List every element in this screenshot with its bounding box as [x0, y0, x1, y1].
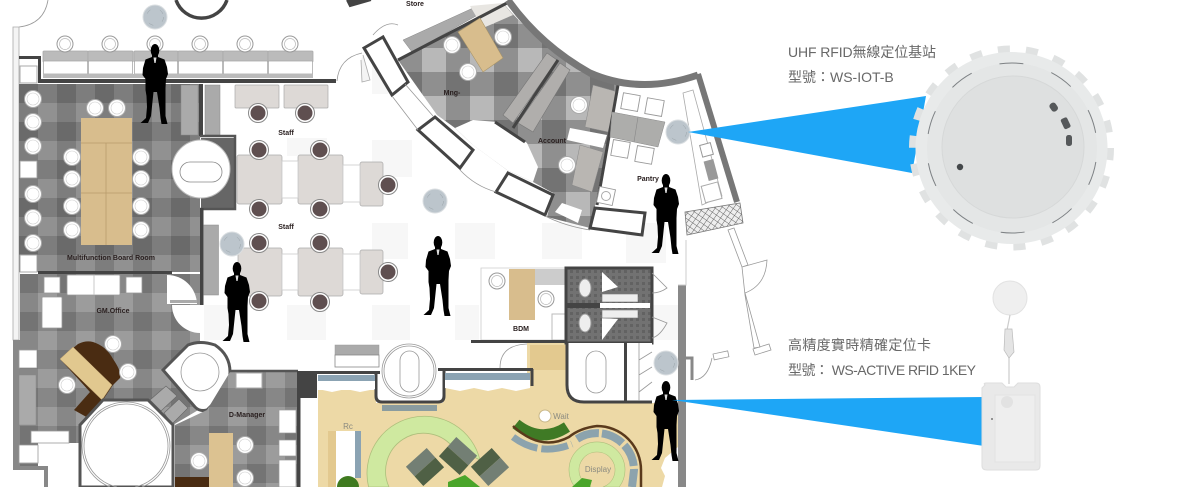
blue beam: base station — [688, 96, 926, 173]
label: staff lower: Staff — [278, 224, 294, 231]
workstation row — [43, 36, 313, 78]
green circular rug — [367, 416, 480, 487]
label: Account: Account — [538, 138, 567, 145]
board table — [81, 118, 132, 245]
top circular room wall — [176, 0, 227, 18]
LEDs — [1048, 101, 1072, 146]
reception desk: Rc — [343, 422, 353, 431]
back to back cabinets — [495, 53, 570, 142]
display area: Display — [585, 465, 611, 474]
pantry chairs — [597, 93, 664, 205]
oval pod — [382, 344, 436, 398]
walls of upper left rooms — [19, 56, 336, 83]
label: Mng: Mng- — [444, 90, 461, 97]
heading: tag caption: 型號： WS-ACTIVE RFID 1KEY — [788, 362, 977, 378]
rounded phone pod — [150, 342, 230, 424]
panel: restrooms — [566, 268, 667, 343]
heading: base station caption: UHF RFID無線定位基站 — [788, 44, 936, 60]
reception desk — [336, 422, 361, 487]
label: GM office: GM.Office — [96, 308, 130, 315]
balcony hatch — [685, 203, 743, 235]
storage and round meeting pod — [172, 84, 235, 305]
green curved sofa — [513, 424, 641, 487]
pantry table — [610, 112, 665, 147]
blue beam: tag — [672, 397, 984, 446]
wait stool: Wait — [553, 412, 570, 421]
door arcs — [19, 0, 527, 368]
heading: tag caption: 高精度實時精確定位卡 — [788, 337, 931, 353]
display area — [569, 433, 634, 487]
label: store: Store — [406, 1, 424, 8]
icon: RFID base station device — [914, 50, 1110, 246]
decorative floor tiles in open area — [204, 58, 678, 340]
panel: pantry — [597, 90, 743, 235]
floor plan — [13, 0, 771, 487]
label: staff: Staff — [278, 130, 294, 137]
manager desk — [458, 18, 503, 72]
panel: staff desks — [235, 85, 398, 312]
panel: multifunction board room — [19, 84, 200, 274]
exterior left wall — [13, 27, 19, 340]
curved lobby walls — [299, 369, 533, 402]
storage strip — [398, 3, 513, 60]
account desks — [555, 85, 618, 223]
panel: GM office — [13, 274, 200, 487]
exterior right wall and doors — [678, 228, 771, 487]
label: BDM: BDM — [513, 326, 529, 333]
panel: reception lobby — [297, 343, 678, 487]
heading: board room label: Multifunction Board Room — [67, 255, 155, 262]
curved thick wall — [508, 0, 737, 202]
panel: D-manager office — [173, 371, 298, 487]
panel: BDM room — [471, 268, 567, 343]
executive desk — [60, 341, 120, 419]
lounge sofas — [406, 437, 509, 487]
benches — [318, 373, 530, 411]
sofa set — [19, 275, 142, 463]
board room chairs — [24, 90, 150, 252]
white strip by wall — [661, 447, 678, 487]
label: pantry: Pantry — [637, 176, 659, 183]
sofa above lobby — [335, 345, 379, 367]
ceiling beacons — [143, 5, 690, 375]
icon: active RFID tag with lanyard — [982, 281, 1040, 470]
curved window segments — [347, 0, 645, 235]
heading: base station caption — [788, 44, 936, 85]
manager chairs — [444, 28, 512, 80]
octagon round room — [80, 400, 173, 487]
heading: tag caption — [788, 337, 977, 378]
heading: base station caption: 型號：WS-IOT-B — [788, 69, 894, 85]
white corridor blob — [455, 120, 538, 182]
panel: lower lounge room — [566, 343, 652, 402]
label: D-manager: D-Manager — [229, 412, 265, 419]
wait stool — [539, 410, 570, 422]
people silhouettes — [140, 44, 679, 461]
panel: manager and account offices — [398, 3, 618, 228]
kitchen counter — [683, 90, 722, 205]
